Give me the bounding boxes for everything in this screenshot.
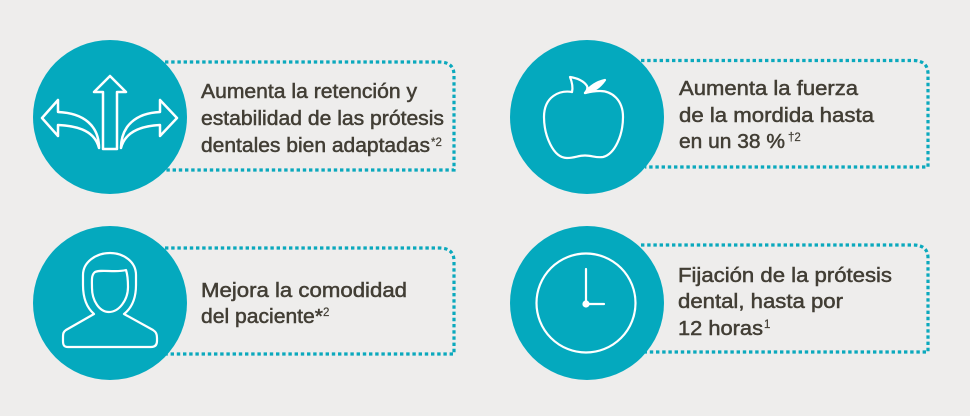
panel: bite force: de la mordida hasta xyxy=(679,105,875,127)
text: bite force: Aumenta la fuerza xyxy=(679,78,859,100)
panel: 12 hour hold xyxy=(510,226,928,380)
icon: person xyxy=(63,253,157,347)
panel: 12 hour hold: dental, hasta por xyxy=(678,291,843,313)
panel: bite force: en un 38 % xyxy=(679,131,785,153)
icon: apple xyxy=(544,77,623,158)
panel: retention: dentales bien adaptadas xyxy=(201,135,430,157)
panel: retention: *2 xyxy=(431,137,442,149)
panel: bite force xyxy=(510,40,928,194)
panel: bite force: †2 xyxy=(788,132,801,144)
text: 12 hour hold: Fijación de la prótesis xyxy=(678,265,892,287)
panel: retention: estabilidad de las prótesis xyxy=(201,108,444,130)
panel: comfort xyxy=(33,226,454,380)
panel: 12 hour hold: 12 horas xyxy=(678,318,763,340)
panel: 12 hour hold: 1 xyxy=(764,319,770,331)
icon: three arrows xyxy=(42,76,177,149)
panel: comfort: del paciente* xyxy=(201,306,323,328)
icon: clock xyxy=(536,254,636,352)
text: retention: Aumenta la retención y xyxy=(201,81,417,103)
panel: retention xyxy=(33,40,454,194)
text: comfort: Mejora la comodidad xyxy=(201,280,407,302)
panel: comfort: 2 xyxy=(323,307,329,319)
